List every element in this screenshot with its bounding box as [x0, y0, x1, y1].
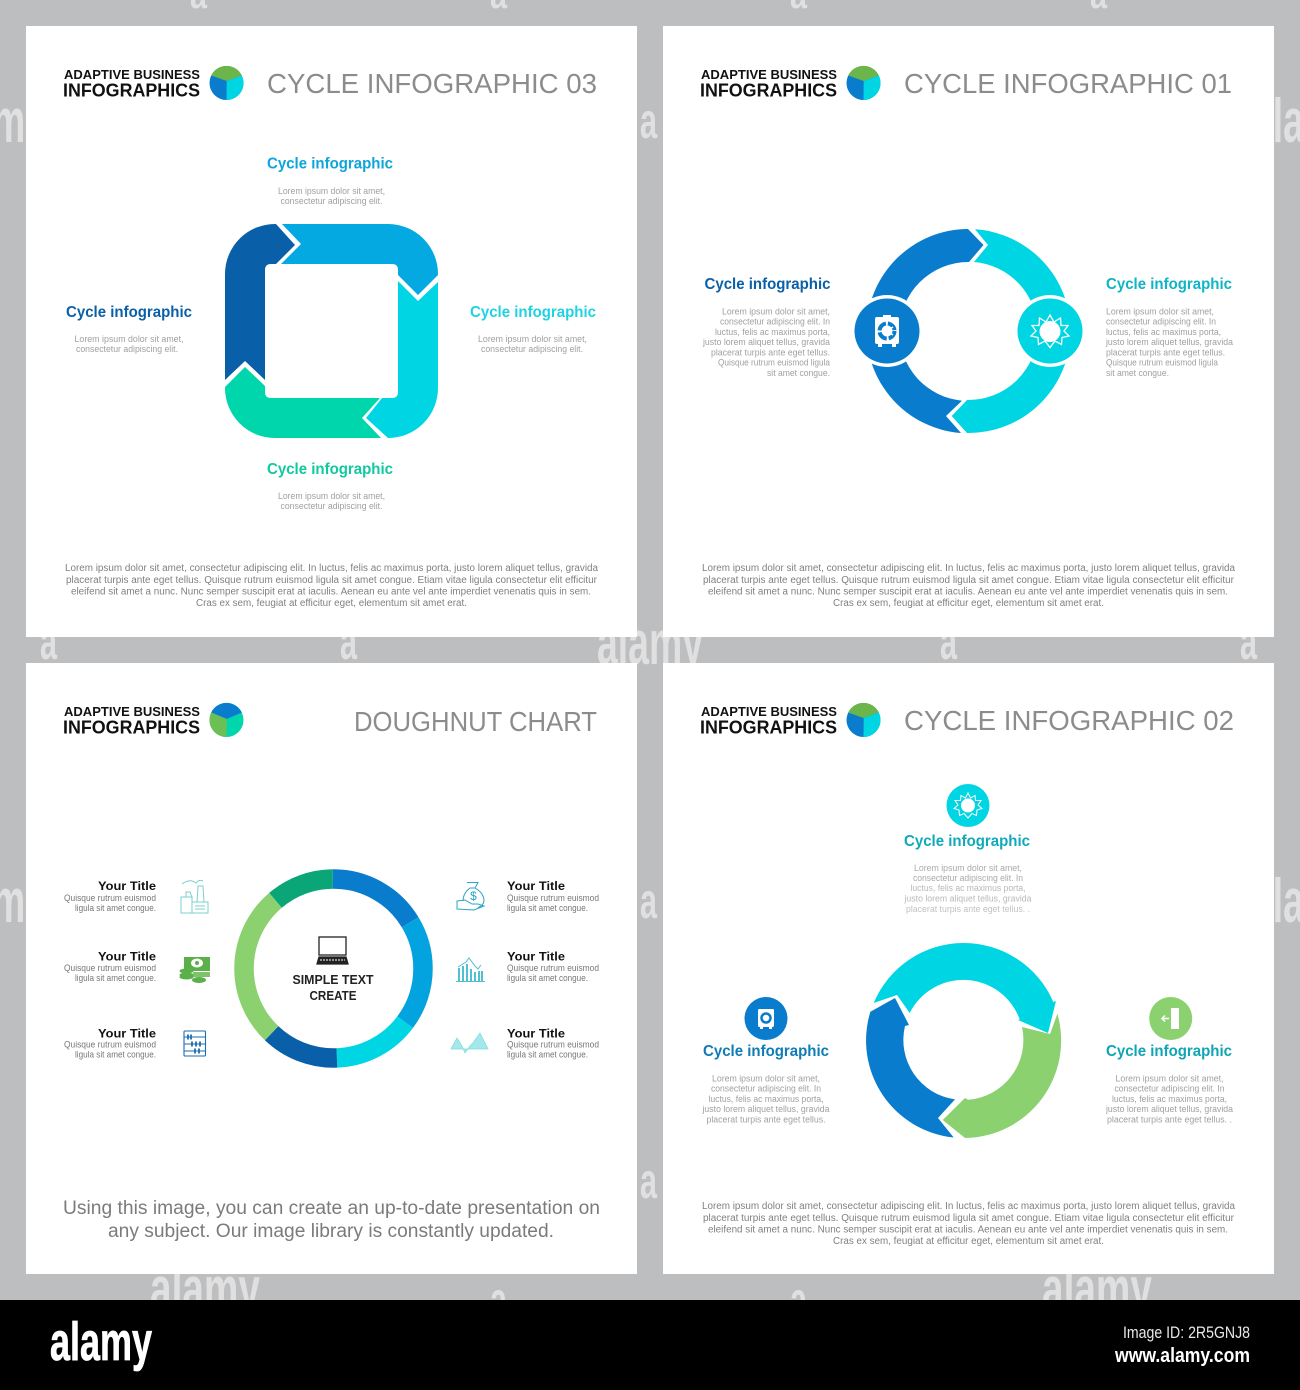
- text block: bottom: Lorem ipsum dolor sit amet,: [278, 491, 385, 501]
- text block: right: Cycle infographic: [470, 304, 596, 321]
- text block: top: placerat turpis ante eget tellus. .: [906, 904, 1030, 914]
- text block: top: Cycle infographic: [904, 833, 1030, 850]
- icon: money bag: [457, 882, 484, 910]
- right item 2: Your Title: [507, 952, 565, 964]
- text block: left: [702, 1043, 830, 1124]
- text block: top: consectetur adipiscing elit.: [280, 196, 382, 206]
- right item 2: [507, 952, 599, 983]
- text block: top: Lorem ipsum dolor sit amet,: [914, 863, 1022, 873]
- text block: left: consectetur adipiscing elit. In: [720, 316, 830, 326]
- text block: right: placerat turpis ante eget tellus. .: [1107, 1114, 1232, 1124]
- body paragraph: Lorem ipsum dolor sit amet, consectetur adipiscing elit. In luctus, felis ac maximus porta, justo lorem aliquet tellus, gravida: [702, 563, 1235, 574]
- text block: right: Lorem ipsum dolor sit amet,: [1106, 306, 1214, 316]
- text block: top: [904, 833, 1032, 914]
- watermark fragments: a: [940, 613, 958, 671]
- caption: any subject. Our image library is constantly updated.: [108, 1221, 554, 1242]
- text block: right: [1105, 276, 1233, 378]
- text block: right: luctus, felis ac maximus porta,: [1112, 1094, 1227, 1104]
- watermark fragments: a: [1240, 613, 1258, 671]
- text block: left: Cycle infographic: [703, 1043, 829, 1060]
- text block: top: [267, 156, 393, 206]
- text block: bottom: [267, 461, 393, 511]
- text block: right: luctus, felis ac maximus porta,: [1106, 327, 1221, 337]
- text block: top: Lorem ipsum dolor sit amet,: [278, 186, 385, 196]
- three-arrow cycle diagram: [866, 943, 1061, 1138]
- logo: INFOGRAPHICS: [63, 80, 200, 100]
- text block: right: consectetur adipiscing elit.: [481, 344, 583, 354]
- logo: INFOGRAPHICS: [700, 80, 837, 100]
- text block: right: [470, 304, 596, 354]
- icon: safe: [875, 315, 899, 347]
- text block: left: Cycle infographic: [66, 304, 192, 321]
- text block: left: luctus, felis ac maximus porta,: [715, 327, 830, 337]
- left item 3: Quisque rutrum euismod: [64, 1040, 156, 1050]
- caption: Using this image, you can create an up-to-date presentation on: [63, 1198, 600, 1219]
- watermark fragments: a: [40, 613, 58, 671]
- text block: left: Quisque rutrum euismod ligula: [718, 358, 830, 368]
- watermark fragments: alamy: [597, 609, 703, 678]
- text block: right: consectetur adipiscing elit. In: [1114, 1084, 1224, 1094]
- text block: top: Cycle infographic: [267, 156, 393, 172]
- body paragraph: placerat turpis ante eget tellus. Quisque rutrum euismod ligula sit amet congue. Etiam vitae ligula consectetur elit efficitur: [66, 575, 598, 586]
- text block: left: consectetur adipiscing elit.: [76, 344, 178, 354]
- text block: left: Lorem ipsum dolor sit amet,: [74, 334, 184, 344]
- icon: factory: [181, 880, 208, 913]
- watermark fragments: alamy: [150, 1255, 260, 1324]
- left item 2: Your Title: [98, 952, 156, 964]
- right item 1: [507, 881, 599, 913]
- body paragraph: Cras ex sem, feugiat at efficitur eget, elementum sit amet erat.: [196, 598, 467, 609]
- left item 2: ligula sit amet congue.: [75, 973, 156, 983]
- left item 2: [64, 952, 156, 983]
- footer logo: alamy: [50, 1312, 152, 1372]
- text block: bottom: consectetur adipiscing elit.: [280, 501, 382, 511]
- text block: left: luctus, felis ac maximus porta,: [708, 1094, 824, 1104]
- text block: left: justo lorem aliquet tellus, gravida: [702, 1104, 830, 1114]
- caption: [63, 1198, 600, 1242]
- right item 1: Your Title: [507, 881, 565, 893]
- body paragraph: Lorem ipsum dolor sit amet, consectetur adipiscing elit. In luctus, felis ac maximus porta, justo lorem aliquet tellus, gravida: [702, 1201, 1235, 1212]
- body paragraph: eleifend sit amet a nunc. Nunc semper suscipit erat at iaculis. Aenean eu ante vel ante imperdiet venenatis quis in sem.: [708, 586, 1228, 598]
- text block: right: justo lorem aliquet tellus, gravida: [1105, 337, 1233, 347]
- text block: left: Lorem ipsum dolor sit amet,: [712, 1074, 820, 1084]
- right item 3: Quisque rutrum euismod: [507, 1040, 599, 1050]
- text block: right: Cycle infographic: [1106, 1043, 1232, 1060]
- square cycle diagram: [225, 224, 438, 438]
- watermark fragments: a: [640, 93, 658, 149]
- right item 1: Quisque rutrum euismod: [507, 893, 599, 903]
- footer url: www.alamy.com: [1114, 1345, 1250, 1367]
- text block: right: Lorem ipsum dolor sit amet,: [478, 334, 587, 344]
- left item 1: Quisque rutrum euismod: [64, 893, 156, 903]
- body paragraph: placerat turpis ante eget tellus. Quisque rutrum euismod ligula sit amet congue. Etiam vitae ligula consectetur elit efficitur: [703, 1213, 1235, 1224]
- text block: left: [66, 304, 192, 354]
- text block: right: Quisque rutrum euismod ligula: [1106, 358, 1218, 368]
- left item 2: Quisque rutrum euismod: [64, 963, 156, 973]
- text block: left: placerat turpis ante eget tellus.: [706, 1114, 826, 1124]
- right item 3: [507, 1028, 599, 1060]
- panel: doughnut chart: [26, 663, 637, 1274]
- right item 1: ligula sit amet congue.: [507, 903, 588, 913]
- logo: [63, 66, 244, 100]
- doughnut centre label: CREATE: [310, 989, 356, 1003]
- logo: INFOGRAPHICS: [700, 718, 837, 738]
- text block: left: [702, 276, 831, 378]
- left item 3: [64, 1028, 156, 1060]
- body paragraph: placerat turpis ante eget tellus. Quisque rutrum euismod ligula sit amet congue. Etiam vitae ligula consectetur elit efficitur: [703, 575, 1235, 586]
- text block: bottom: Cycle infographic: [267, 461, 393, 478]
- icon: money: [180, 957, 210, 983]
- text block: right: justo lorem aliquet tellus, gravida: [1105, 1104, 1233, 1114]
- watermark fragments: a: [640, 1153, 658, 1209]
- text block: left: sit amet congue.: [767, 368, 830, 378]
- title: CYCLE INFOGRAPHIC 03: [267, 68, 597, 99]
- text block: top: luctus, felis ac maximus porta,: [910, 883, 1026, 893]
- icon node: right exit door: [1149, 997, 1192, 1040]
- text block: right: sit amet congue.: [1106, 368, 1169, 378]
- right item 3: ligula sit amet congue.: [507, 1050, 588, 1060]
- text block: left: justo lorem aliquet tellus, gravida: [702, 337, 830, 347]
- doughnut chart: [244, 879, 423, 1058]
- logo: ADAPTIVE BUSINESS: [64, 704, 200, 719]
- text block: left: placerat turpis ante eget tellus.: [711, 348, 830, 358]
- icon: money bag: $: [470, 889, 477, 903]
- doughnut centre label: SIMPLE TEXT: [292, 973, 374, 987]
- doughnut centre label: [292, 973, 374, 1003]
- watermark fragments: alamy: [1042, 1255, 1152, 1324]
- left item 3: ligula sit amet congue.: [75, 1050, 156, 1060]
- text block: right: placerat turpis ante eget tellus.: [1106, 348, 1225, 358]
- text block: right: Cycle infographic: [1106, 276, 1232, 293]
- logo: [700, 703, 881, 738]
- right item 2: ligula sit amet congue.: [507, 973, 588, 983]
- title: CYCLE INFOGRAPHIC 02: [904, 705, 1234, 736]
- text block: top: consectetur adipiscing elit. In: [913, 873, 1023, 883]
- icon node: top star badge: [946, 784, 990, 827]
- ring cycle diagram: [851, 229, 1086, 433]
- right item 2: Quisque rutrum euismod: [507, 963, 599, 973]
- body paragraph: Cras ex sem, feugiat at efficitur eget, elementum sit amet erat.: [833, 1236, 1104, 1247]
- body paragraph: [65, 563, 598, 609]
- right item 3: Your Title: [507, 1028, 565, 1040]
- image id: Image ID: 2R5GNJ8: [1123, 1323, 1250, 1342]
- body paragraph: eleifend sit amet a nunc. Nunc semper suscipit erat at iaculis. Aenean eu ante vel ante imperdiet venenatis quis in sem.: [71, 586, 591, 598]
- text block: right: Lorem ipsum dolor sit amet,: [1116, 1074, 1224, 1084]
- left item 3: Your Title: [98, 1028, 156, 1040]
- body paragraph: eleifend sit amet a nunc. Nunc semper suscipit erat at iaculis. Aenean eu ante vel ante imperdiet venenatis quis in sem.: [708, 1224, 1228, 1236]
- left item 1: Your Title: [98, 881, 156, 893]
- body paragraph: Cras ex sem, feugiat at efficitur eget, elementum sit amet erat.: [833, 598, 1104, 609]
- icon: laptop: [317, 937, 348, 964]
- text block: left: consectetur adipiscing elit. In: [711, 1084, 821, 1094]
- text block: right: [1105, 1043, 1233, 1124]
- text block: left: Lorem ipsum dolor sit amet,: [722, 306, 830, 316]
- left item 1: [64, 881, 156, 913]
- body paragraph: [702, 563, 1235, 609]
- logo: INFOGRAPHICS: [63, 718, 200, 738]
- text block: right: consectetur adipiscing elit. In: [1106, 316, 1216, 326]
- icon: bar chart: [456, 958, 485, 982]
- footer bar: [0, 1300, 1300, 1390]
- logo: ADAPTIVE BUSINESS: [64, 67, 200, 82]
- title: DOUGHNUT CHART: [354, 706, 597, 737]
- logo: ADAPTIVE BUSINESS: [701, 67, 837, 82]
- watermark fragments: a: [340, 613, 358, 671]
- panel: cycle infographic 03: [26, 26, 637, 637]
- left item 1: ligula sit amet congue.: [75, 903, 156, 913]
- logo: [63, 703, 244, 738]
- logo: [700, 66, 881, 100]
- watermark fragments: a: [640, 873, 658, 929]
- text block: left: Cycle infographic: [704, 276, 831, 293]
- icon node: left safe: [744, 997, 788, 1040]
- body paragraph: Lorem ipsum dolor sit amet, consectetur adipiscing elit. In luctus, felis ac maximus porta, justo lorem aliquet tellus, gravida: [65, 563, 598, 574]
- text block: top: justo lorem aliquet tellus, gravida: [904, 894, 1032, 904]
- title: CYCLE INFOGRAPHIC 01: [904, 68, 1232, 99]
- icon: mountains: [451, 1033, 488, 1053]
- body paragraph: [702, 1201, 1235, 1247]
- icon: abacus: [184, 1031, 206, 1056]
- panel: cycle infographic 02: [663, 663, 1274, 1274]
- logo: ADAPTIVE BUSINESS: [701, 704, 837, 719]
- watermark fragments: a: [490, 1272, 508, 1330]
- watermark fragments: a: [790, 1272, 808, 1330]
- icon: star badge: [1031, 315, 1069, 348]
- panel: cycle infographic 01: [663, 26, 1274, 637]
